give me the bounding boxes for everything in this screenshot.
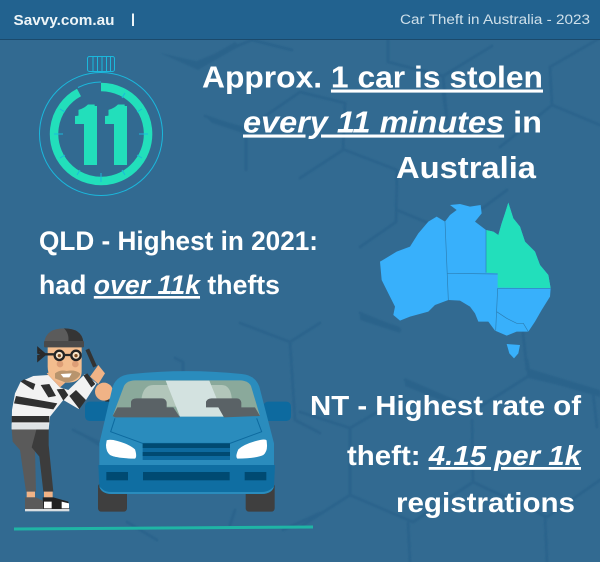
bumper vents [106,472,128,480]
headlights [106,440,136,459]
windshield [113,380,260,416]
beanie [44,328,83,342]
map of Australia [380,203,551,358]
neck and face [47,367,68,387]
header title: Car Theft in Australia - 2023 [400,12,590,27]
text: NT highest rate of theft: theft: 4.15 per 1k [347,440,582,471]
body [99,371,274,465]
wheels [98,483,127,512]
text: NT highest rate of theft [310,390,582,518]
illustration: thief beside car [12,328,291,512]
ground line [14,527,313,529]
header bar [0,0,600,40]
hand on car [95,383,113,401]
text: NT highest rate of theft: registrations [396,487,575,518]
Queensland highlighted [486,203,551,288]
striped shirt [12,374,97,429]
text: QLD highest in 2021: QLD - Highest in 2021: [39,226,318,256]
car [85,371,291,512]
headline: 1 car stolen every 11 minutes: Approx. 1 car is stolen [202,60,543,94]
grille [143,443,230,460]
shoes [25,497,52,509]
text: NT highest rate of theft: NT - Highest rate of [310,390,582,421]
hood crease [111,418,262,443]
legs [12,428,38,492]
icon: stopwatch showing 11: 11 [74,70,134,189]
burglar mask [55,351,81,360]
thief [12,328,113,511]
crowbar [87,349,112,408]
headline: 1 car stolen every 11 minutes: every 11 minutes in [243,104,542,140]
headline: 1 car stolen every 11 minutes: Australia [396,150,537,185]
text: QLD highest in 2021: had over 11k thefts [39,270,280,300]
Tasmania [507,344,520,358]
header divider [132,14,134,26]
headline: 1 car stolen every 11 minutes [202,60,543,185]
brand name: Savvy.com.au [14,13,114,29]
icon: stopwatch showing 11 [40,56,162,196]
mirrors [85,402,113,421]
text: QLD highest in 2021 [39,226,318,300]
